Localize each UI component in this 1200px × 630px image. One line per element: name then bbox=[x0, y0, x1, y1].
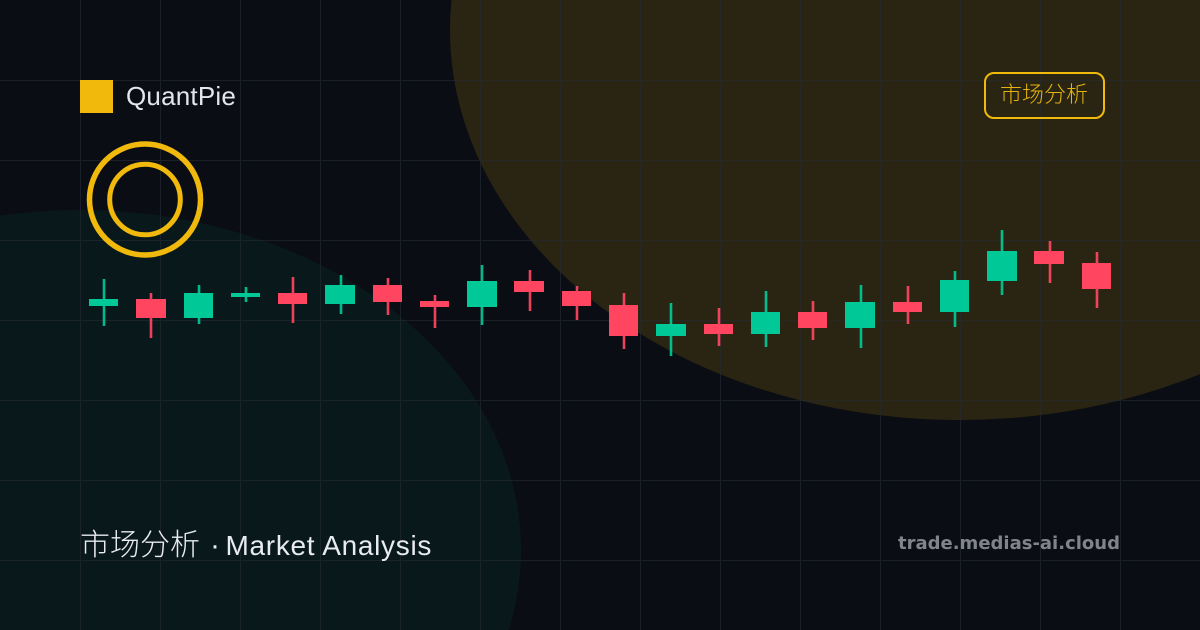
logo square bbox=[80, 80, 113, 113]
footer title: Market Analysis bbox=[226, 530, 432, 561]
wordmark: QuantPie bbox=[126, 81, 236, 111]
footer title: 市场分析 bbox=[80, 529, 200, 562]
footer title: · bbox=[210, 529, 220, 562]
candlestick chart bbox=[89, 230, 1111, 356]
logo: square mark and wordmark bbox=[80, 80, 236, 113]
background blob: yellow bbox=[450, 0, 1200, 420]
background blob: teal bbox=[0, 210, 521, 630]
tag: market analysis badge: 市场分析 bbox=[1000, 82, 1088, 107]
icon: concentric rings bbox=[90, 144, 200, 255]
tag: market analysis badge bbox=[985, 73, 1104, 118]
footer url: trade.medias-ai.cloud bbox=[898, 533, 1120, 554]
